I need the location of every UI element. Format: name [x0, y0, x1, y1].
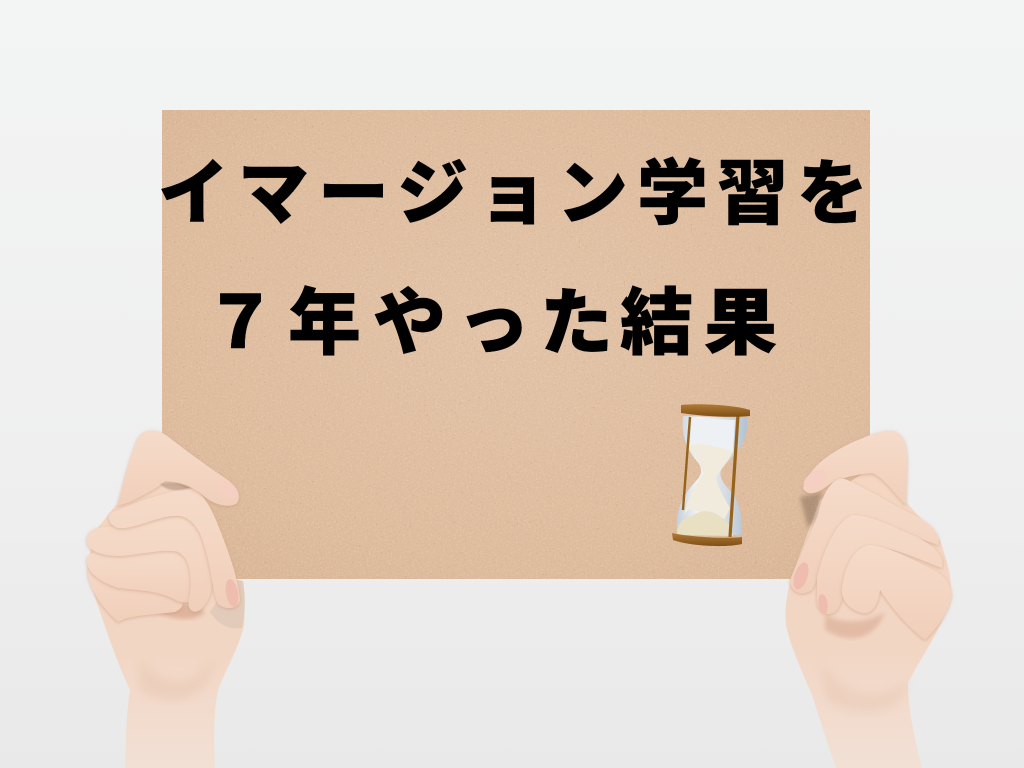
- right hand: thumb-side finger: [803, 431, 907, 505]
- left hand: nails: [216, 478, 242, 608]
- title: line 2: ７年やった結果: [204, 283, 777, 364]
- left hand: index finger: [109, 488, 240, 608]
- left hand: palm shading: [140, 655, 215, 701]
- right hand: nails: [790, 466, 830, 615]
- right hand: shadow on sign behind the fingers: [800, 492, 822, 528]
- left hand: shadow below the sign edge: [210, 579, 245, 628]
- right hand: [785, 431, 952, 768]
- icon: hourglass: [672, 404, 750, 546]
- left hand: ring finger: [87, 549, 197, 602]
- left hand: fist hollow: [150, 602, 205, 619]
- right hand: wrist fold shading: [820, 660, 908, 713]
- title: line 1: イマージョン学習を: [158, 155, 868, 234]
- right hand: index finger: [790, 479, 939, 593]
- right hand: middle finger: [817, 515, 943, 614]
- panel: cardboard sign: [162, 110, 870, 579]
- icon: hourglass rods: [683, 415, 738, 537]
- left hand: thumb-side finger: [117, 430, 239, 506]
- left hand: middle finger: [87, 516, 212, 612]
- right hand: fist hollow: [825, 612, 885, 638]
- left hand: pinky: [88, 557, 183, 622]
- left hand: [87, 430, 245, 768]
- left hand: shadow under the finger: [160, 483, 192, 490]
- right hand: ring finger: [842, 545, 952, 640]
